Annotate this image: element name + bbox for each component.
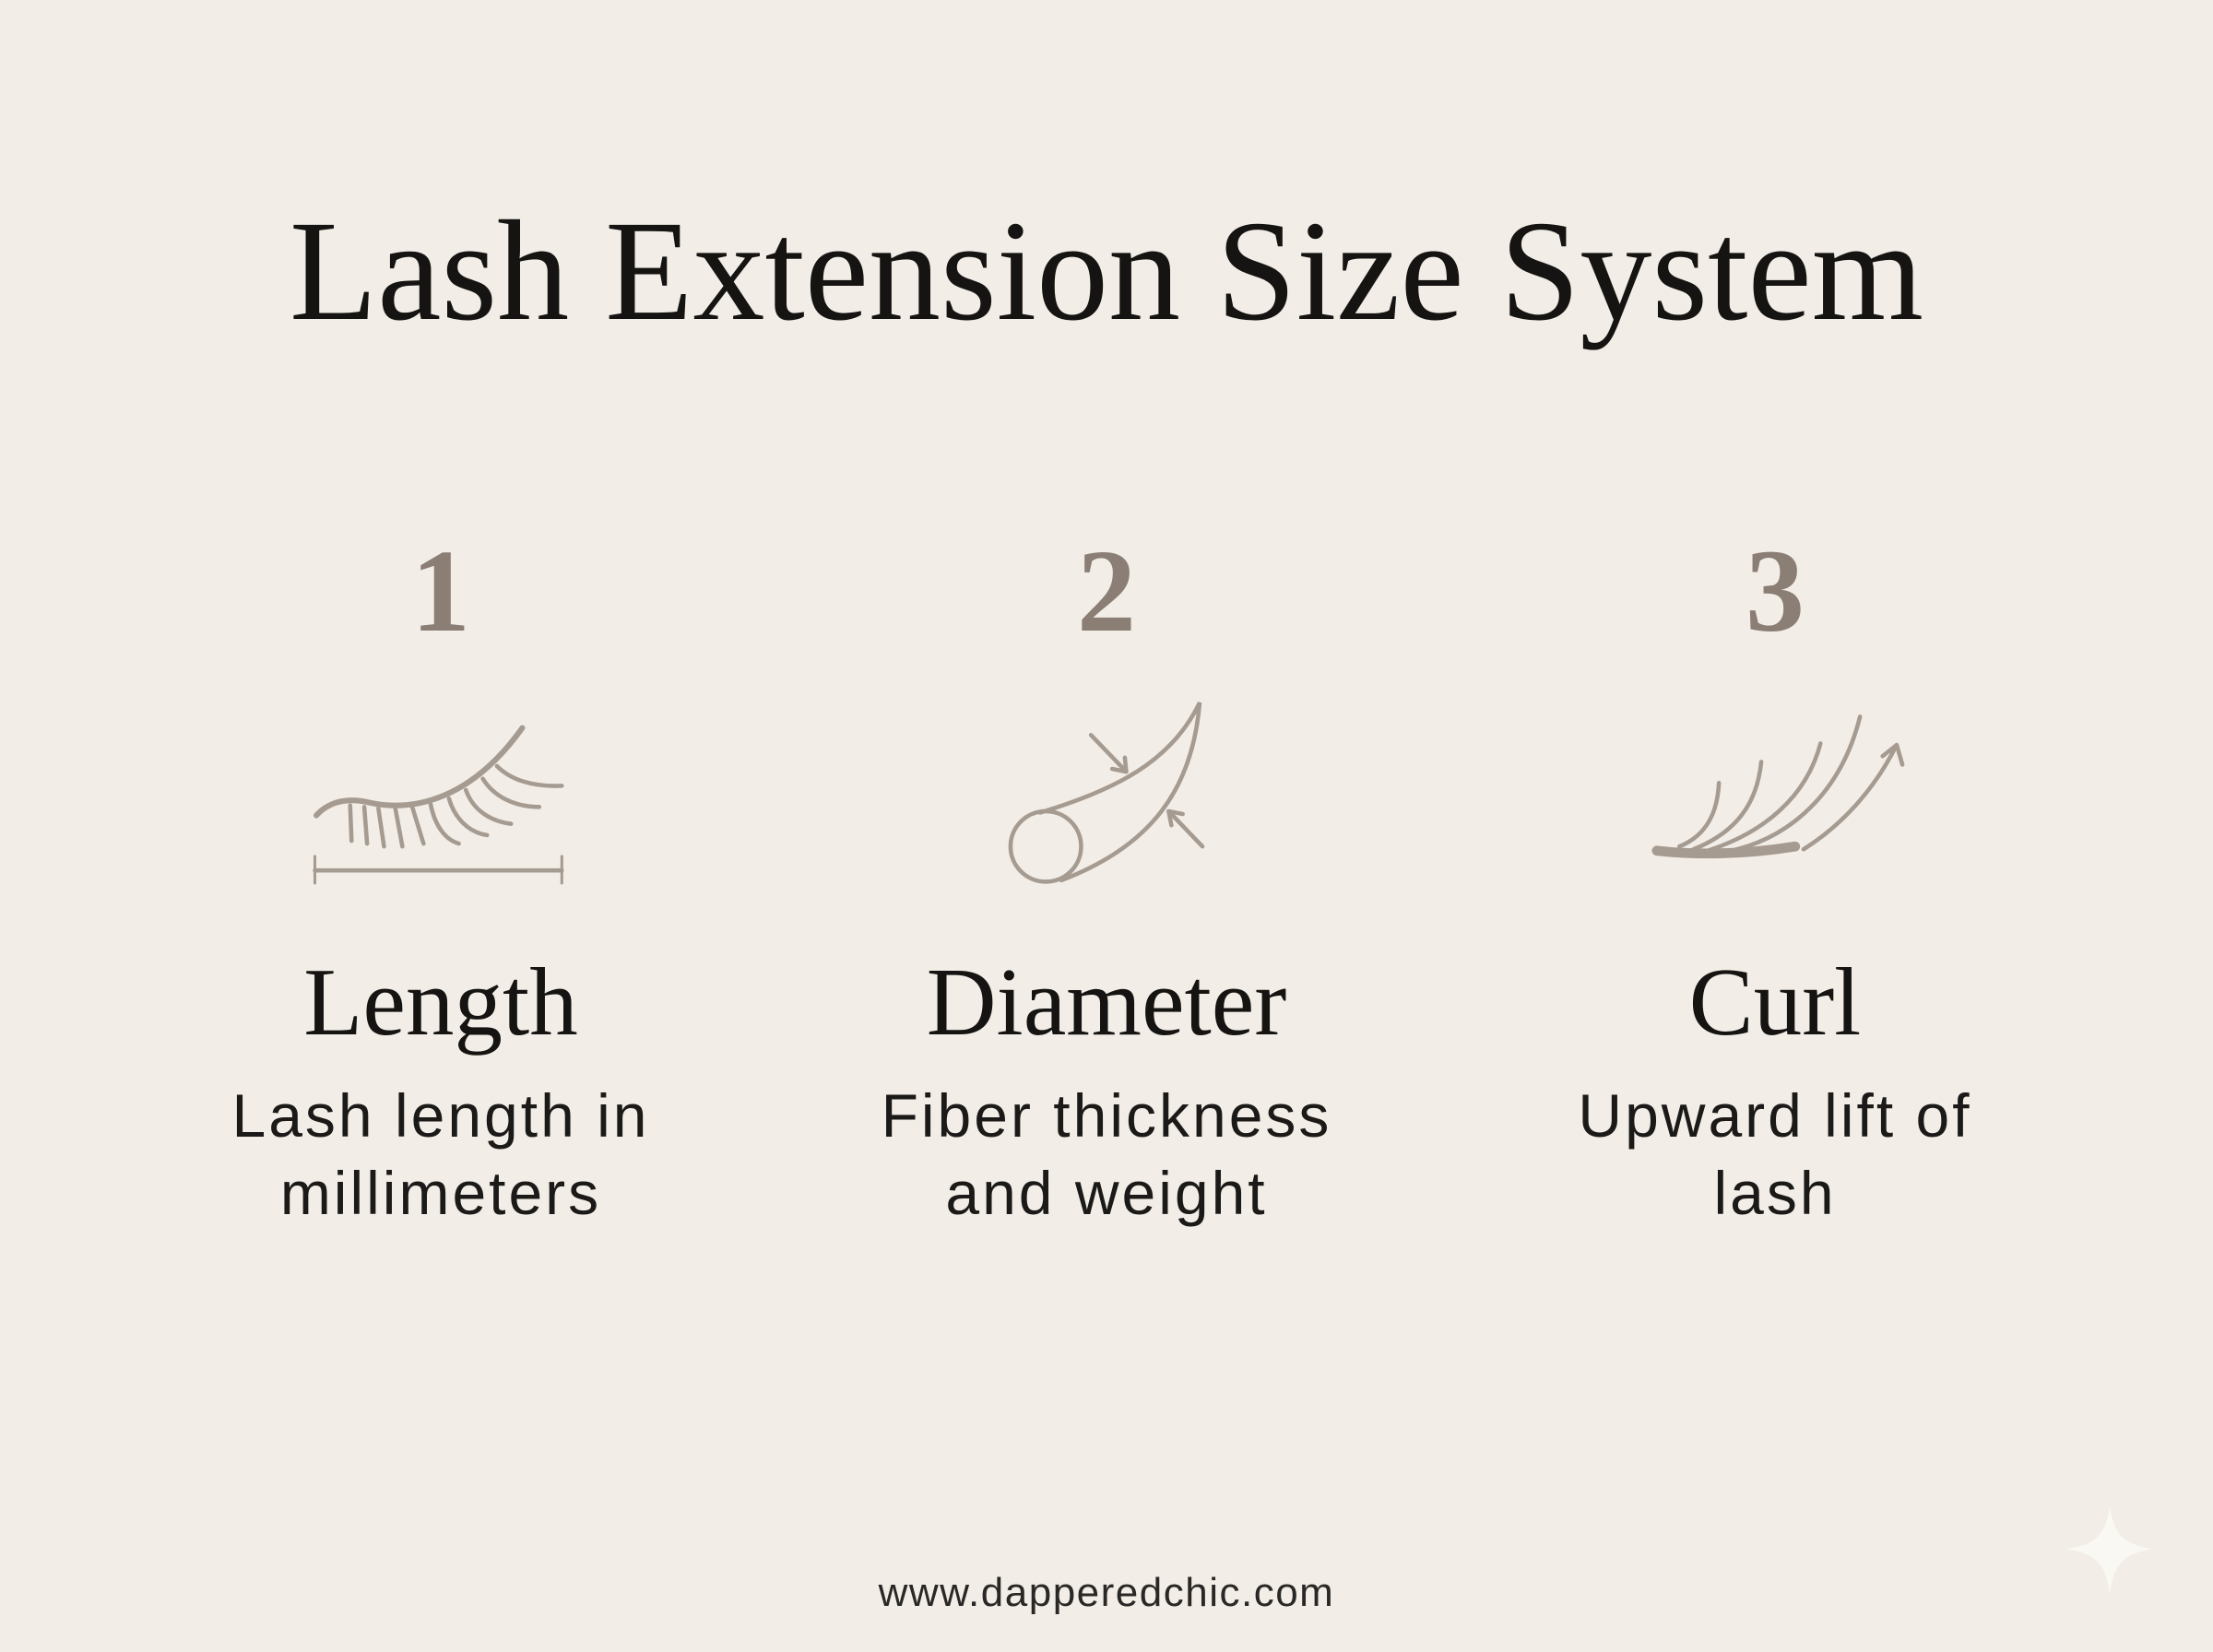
desc: diameter — [882, 1081, 1331, 1227]
desc: curl — [1578, 1081, 1972, 1227]
icon: sparkle — [2066, 1506, 2153, 1594]
desc: diameter: Fiber thickness — [882, 1081, 1331, 1150]
number 1: 1 — [411, 525, 470, 656]
number 3: 3 — [1746, 525, 1805, 656]
heading: Length: Length — [303, 948, 578, 1056]
icon: diameter fiber — [1011, 702, 1202, 881]
icon: curl lashes with arrow — [1657, 716, 1902, 854]
number 2: 2 — [1077, 525, 1136, 656]
desc: length: Lash length in — [232, 1081, 649, 1150]
desc: length — [232, 1081, 649, 1227]
heading: Curl: Curl — [1689, 948, 1861, 1056]
desc: curl: lash — [1713, 1159, 1837, 1227]
heading: Diameter: Diameter — [927, 948, 1286, 1056]
footer url: www.dapperedchic.com — [879, 1570, 1334, 1615]
desc: curl: Upward lift of — [1578, 1081, 1972, 1150]
desc: length: millimeters — [280, 1159, 601, 1227]
icon: eyelashes with length bar — [314, 728, 562, 883]
title: Lash Extension Size System — [290, 191, 1923, 350]
desc: diameter: and weight — [945, 1159, 1268, 1227]
